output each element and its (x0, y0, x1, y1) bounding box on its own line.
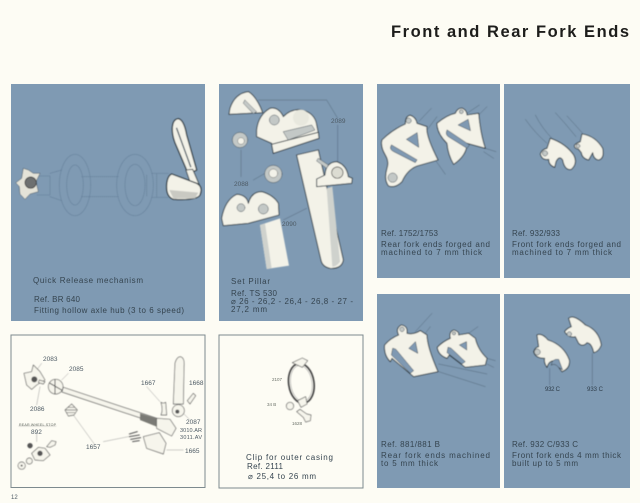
illustration: quick release hub (16, 119, 201, 216)
text: caption 881/881 B (381, 440, 490, 468)
text: caption 1752/1753: machined to 7 mm thick (381, 248, 483, 257)
text: set pillar caption: 27,2 mm (231, 305, 267, 314)
diagram: exploded quick release parts (18, 357, 196, 469)
part numbers: set pillar: 2089 (331, 118, 346, 125)
text: set pillar caption (231, 277, 353, 314)
text: clip caption (246, 453, 333, 481)
illustration: machined rear fork ends (385, 313, 495, 387)
text: caption 1752/1753: Rear fork ends forged and (381, 240, 490, 249)
page number: 12 (11, 495, 18, 501)
part numbers: exploded diagram: 1668 (189, 380, 204, 387)
text: set pillar caption: ⌀ 26 - 26,2 - 26,4 - 26,8 - 27 - (231, 297, 353, 306)
text: caption 1752/1753 (381, 229, 490, 257)
text: caption 932/933: machined to 7 mm thick (512, 248, 613, 257)
text: caption 932 C/933 C: Ref. 932 C/933 C (512, 440, 578, 449)
panel: quick release mechanism (11, 84, 205, 321)
text: caption 932 C/933 C: built up to 5 mm (512, 459, 578, 468)
panel: rear fork ends 881/881 B (377, 294, 500, 488)
panel: front fork ends 932 C/933 C (504, 294, 630, 488)
part numbers: clip: 2107 (272, 377, 283, 382)
text: caption 932 C/933 C (512, 440, 622, 468)
text: clip caption: ⌀ 25,4 to 26 mm (248, 472, 316, 481)
part numbers: set pillar: 2090 (282, 221, 297, 228)
text: caption 932/933 (512, 229, 621, 257)
text: caption 881/881 B: Rear fork ends machined (381, 451, 490, 460)
text: caption 881/881 B: Ref. 881/881 B (381, 440, 440, 449)
diagram: cable clip (286, 358, 317, 422)
text: clip caption: Ref. 2111 (247, 462, 284, 471)
text: caption 1752/1753: Ref. 1752/1753 (381, 229, 439, 238)
part numbers: exploded diagram: 1667 (141, 380, 156, 387)
part numbers: exploded diagram: 3011.AV (180, 435, 202, 441)
part numbers: exploded diagram: 892 (31, 429, 42, 436)
panel: clip for outer casing (219, 335, 363, 488)
part numbers: set pillar: 2088 (234, 181, 249, 188)
part numbers: front fork ends: 933 C (587, 387, 604, 393)
part numbers: clip: 1628 (292, 421, 303, 426)
text: caption 881/881 B: to 5 mm thick (381, 459, 439, 468)
text: clip caption: Clip for outer casing (246, 453, 333, 462)
part numbers: exploded diagram: 2085 (69, 366, 84, 373)
panel: front fork ends 932/933 (504, 84, 630, 278)
text: caption 932/933: Front fork ends forged and (512, 240, 621, 249)
text: quick release caption: Fitting hollow axle hub (3 to 6 speed) (34, 306, 184, 315)
text: caption 932/933: Ref. 932/933 (512, 229, 561, 238)
part numbers: clip (267, 377, 303, 426)
part numbers: clip: 34 B (267, 402, 276, 407)
panel: set pillar (219, 84, 363, 321)
illustration: forged rear fork ends (382, 105, 496, 187)
part numbers: front fork ends: 932 C (545, 387, 561, 393)
illustration: forged front fork ends (525, 113, 603, 169)
text: set pillar caption: Set Pillar (231, 277, 270, 286)
text: quick release caption (33, 276, 184, 315)
part numbers: exploded diagram: 1657 (86, 444, 101, 451)
part numbers: exploded diagram: 2083 (43, 356, 58, 363)
text: caption 932 C/933 C: Front fork ends 4 mm thick (512, 451, 622, 460)
text: quick release caption: Ref. BR 640 (34, 295, 81, 304)
part numbers: exploded diagram (19, 356, 204, 455)
part numbers: front fork ends (545, 387, 604, 393)
part numbers: exploded diagram: 2086 (30, 406, 45, 413)
part numbers: exploded diagram: 2087 (186, 419, 201, 426)
text: quick release caption: Quick Release mechanism (33, 276, 143, 285)
part numbers: exploded diagram: REAR WHEEL STOP (19, 423, 57, 427)
part numbers: set pillar (234, 118, 346, 228)
part numbers: exploded diagram: 3010.AR (180, 428, 202, 434)
illustration: front fork ends 4 mm (534, 317, 601, 385)
part numbers: exploded diagram: 1665 (185, 448, 200, 455)
title: Front and Rear Fork Ends (391, 23, 629, 41)
illustration: set pillar parts (222, 92, 352, 269)
panel: rear fork ends 1752/1753 (377, 84, 500, 278)
text: set pillar caption: Ref. TS 530 (231, 289, 278, 298)
panel: quick release exploded diagram (11, 335, 205, 488)
